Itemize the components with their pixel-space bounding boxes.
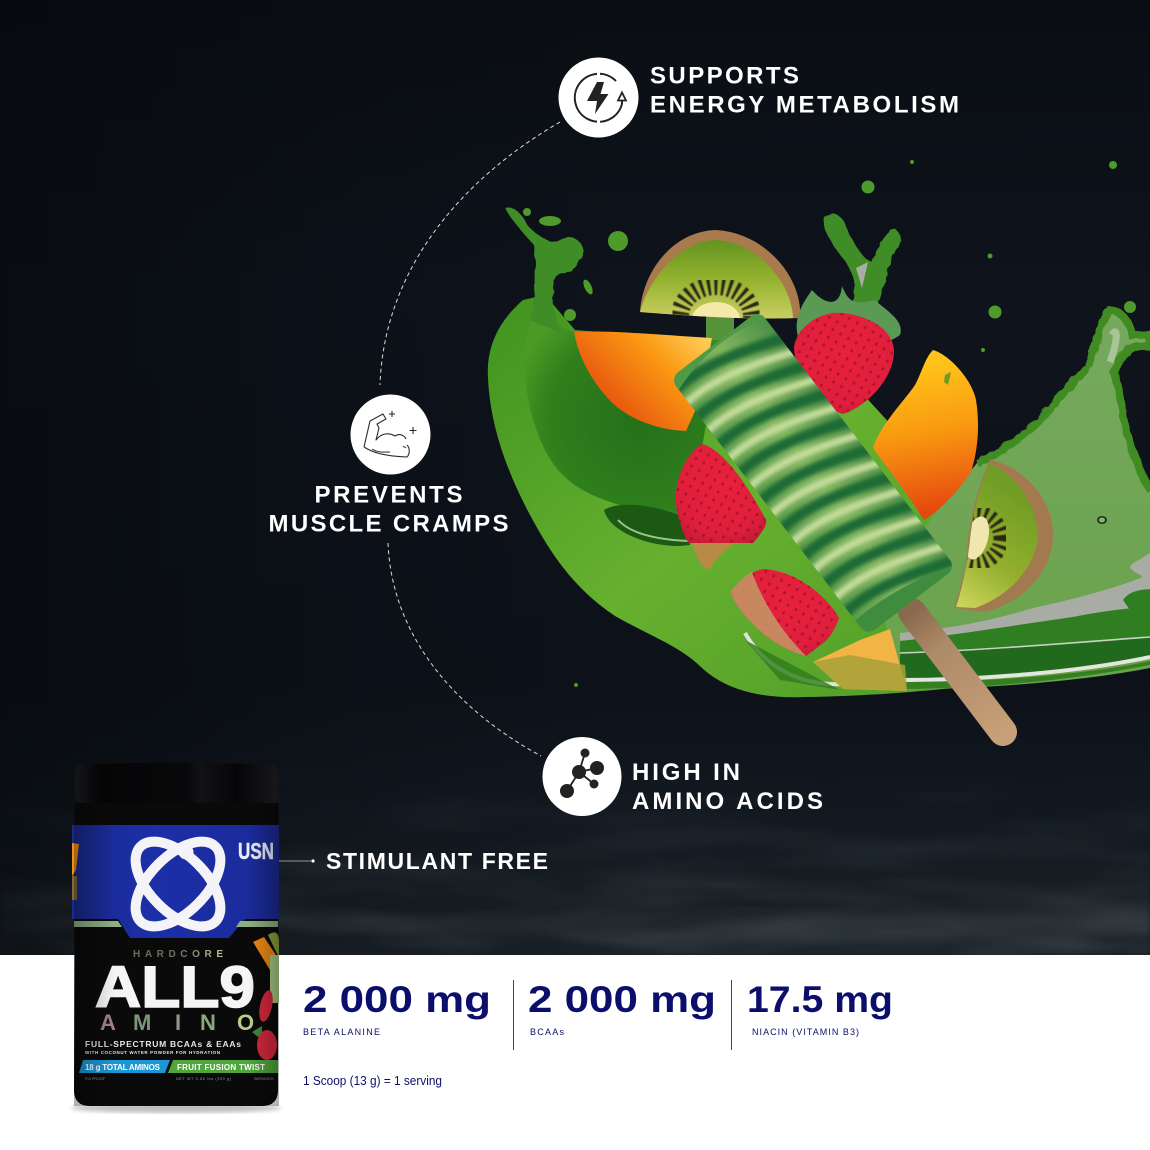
icon: energy badge <box>558 58 638 138</box>
strawberry: bottom <box>730 569 839 656</box>
blue and green tags: FRUIT FUSION TWIST <box>177 1063 265 1072</box>
dashed connector arcs <box>380 122 560 756</box>
label subtitle: FULL-SPECTRUM BCAAs & EAAs <box>85 1039 241 1049</box>
orange slice: bottom <box>813 629 907 691</box>
heading: stimulant free: STIMULANT FREE <box>326 848 548 874</box>
icon: amino molecule badge <box>542 737 622 816</box>
label subtitle <box>85 1039 241 1055</box>
heading: prevents muscle cramps: PREVENTS <box>314 482 462 508</box>
kiwi slice: top <box>640 230 800 346</box>
small print: SERVINGS <box>254 1077 274 1081</box>
orange slice: right <box>873 350 978 520</box>
AMINO wordmark: I <box>175 1010 181 1035</box>
serving note: 1 Scoop (13 g) = 1 serving <box>303 1073 442 1088</box>
popsicle stick <box>912 612 1003 732</box>
label subtitle: WITH COCONUT WATER POWDER FOR HYDRATION <box>85 1050 220 1055</box>
AMINO wordmark <box>100 1010 254 1035</box>
heading: high in amino acids: AMINO ACIDS <box>632 788 823 815</box>
stat: BCAAs: BCAAs <box>530 1027 564 1037</box>
green splash: left sweep <box>488 295 1040 697</box>
blue and green tags <box>79 1060 278 1073</box>
tub lid <box>75 762 278 803</box>
heading: high in amino acids: HIGH IN <box>632 759 740 786</box>
stat: beta alanine: BETA ALANINE <box>303 1027 380 1037</box>
small print: NET WT 0.86 lbs (390 g) <box>176 1077 232 1081</box>
strawberry: left <box>676 444 766 570</box>
label side strips <box>74 921 278 927</box>
stat: niacin: 17.5 mg <box>747 979 893 1020</box>
atom logo <box>121 827 235 941</box>
kiwi slice: right <box>951 460 1053 612</box>
AMINO wordmark: M <box>133 1010 151 1035</box>
tub body <box>74 803 278 1106</box>
white info band <box>0 955 1150 1150</box>
heading: prevents muscle cramps <box>268 482 508 538</box>
blue label band <box>72 825 279 938</box>
stat: BCAAs <box>528 979 716 1037</box>
heading: supports energy metabolism: SUPPORTS <box>650 62 799 90</box>
stat: niacin: NIACIN (VITAMIN B3) <box>752 1027 859 1037</box>
AMINO wordmark: N <box>200 1010 216 1035</box>
small print: FIA PROOF <box>85 1077 106 1081</box>
splash tendrils <box>505 207 900 335</box>
heading: supports energy metabolism <box>650 62 959 118</box>
product tub <box>71 762 281 1113</box>
small print <box>85 1077 274 1081</box>
fruit sliver on left <box>72 843 79 900</box>
connector to stimulant free <box>279 859 315 863</box>
fruit splash illustration <box>488 160 1150 732</box>
stat: niacin <box>747 979 893 1037</box>
USN wordmark: USN <box>238 838 274 864</box>
heading: prevents muscle cramps: MUSCLE CRAMPS <box>268 510 508 538</box>
stat: beta alanine: 2 000 mg <box>303 979 491 1020</box>
icon: flexed muscle badge <box>350 394 430 474</box>
heading: high in amino acids <box>632 759 823 815</box>
stat: BCAAs: 2 000 mg <box>528 979 716 1020</box>
ALL9 wordmark: ALL9 <box>95 955 255 1020</box>
orange slice: left <box>574 332 712 431</box>
fruit art on tub <box>252 932 279 1060</box>
splash droplets <box>523 160 1136 687</box>
AMINO wordmark: O <box>237 1010 254 1035</box>
stat: beta alanine <box>303 979 491 1037</box>
hardcore label: HARDCORE <box>133 949 223 960</box>
striped green popsicle <box>674 314 952 632</box>
heading: supports energy metabolism: ENERGY METABOLISM <box>650 92 959 118</box>
AMINO wordmark: A <box>100 1010 116 1035</box>
green splash: right pool <box>880 310 1150 690</box>
blue and green tags: 18 g TOTAL AMINOS <box>85 1063 161 1072</box>
strawberry: top <box>794 286 901 414</box>
